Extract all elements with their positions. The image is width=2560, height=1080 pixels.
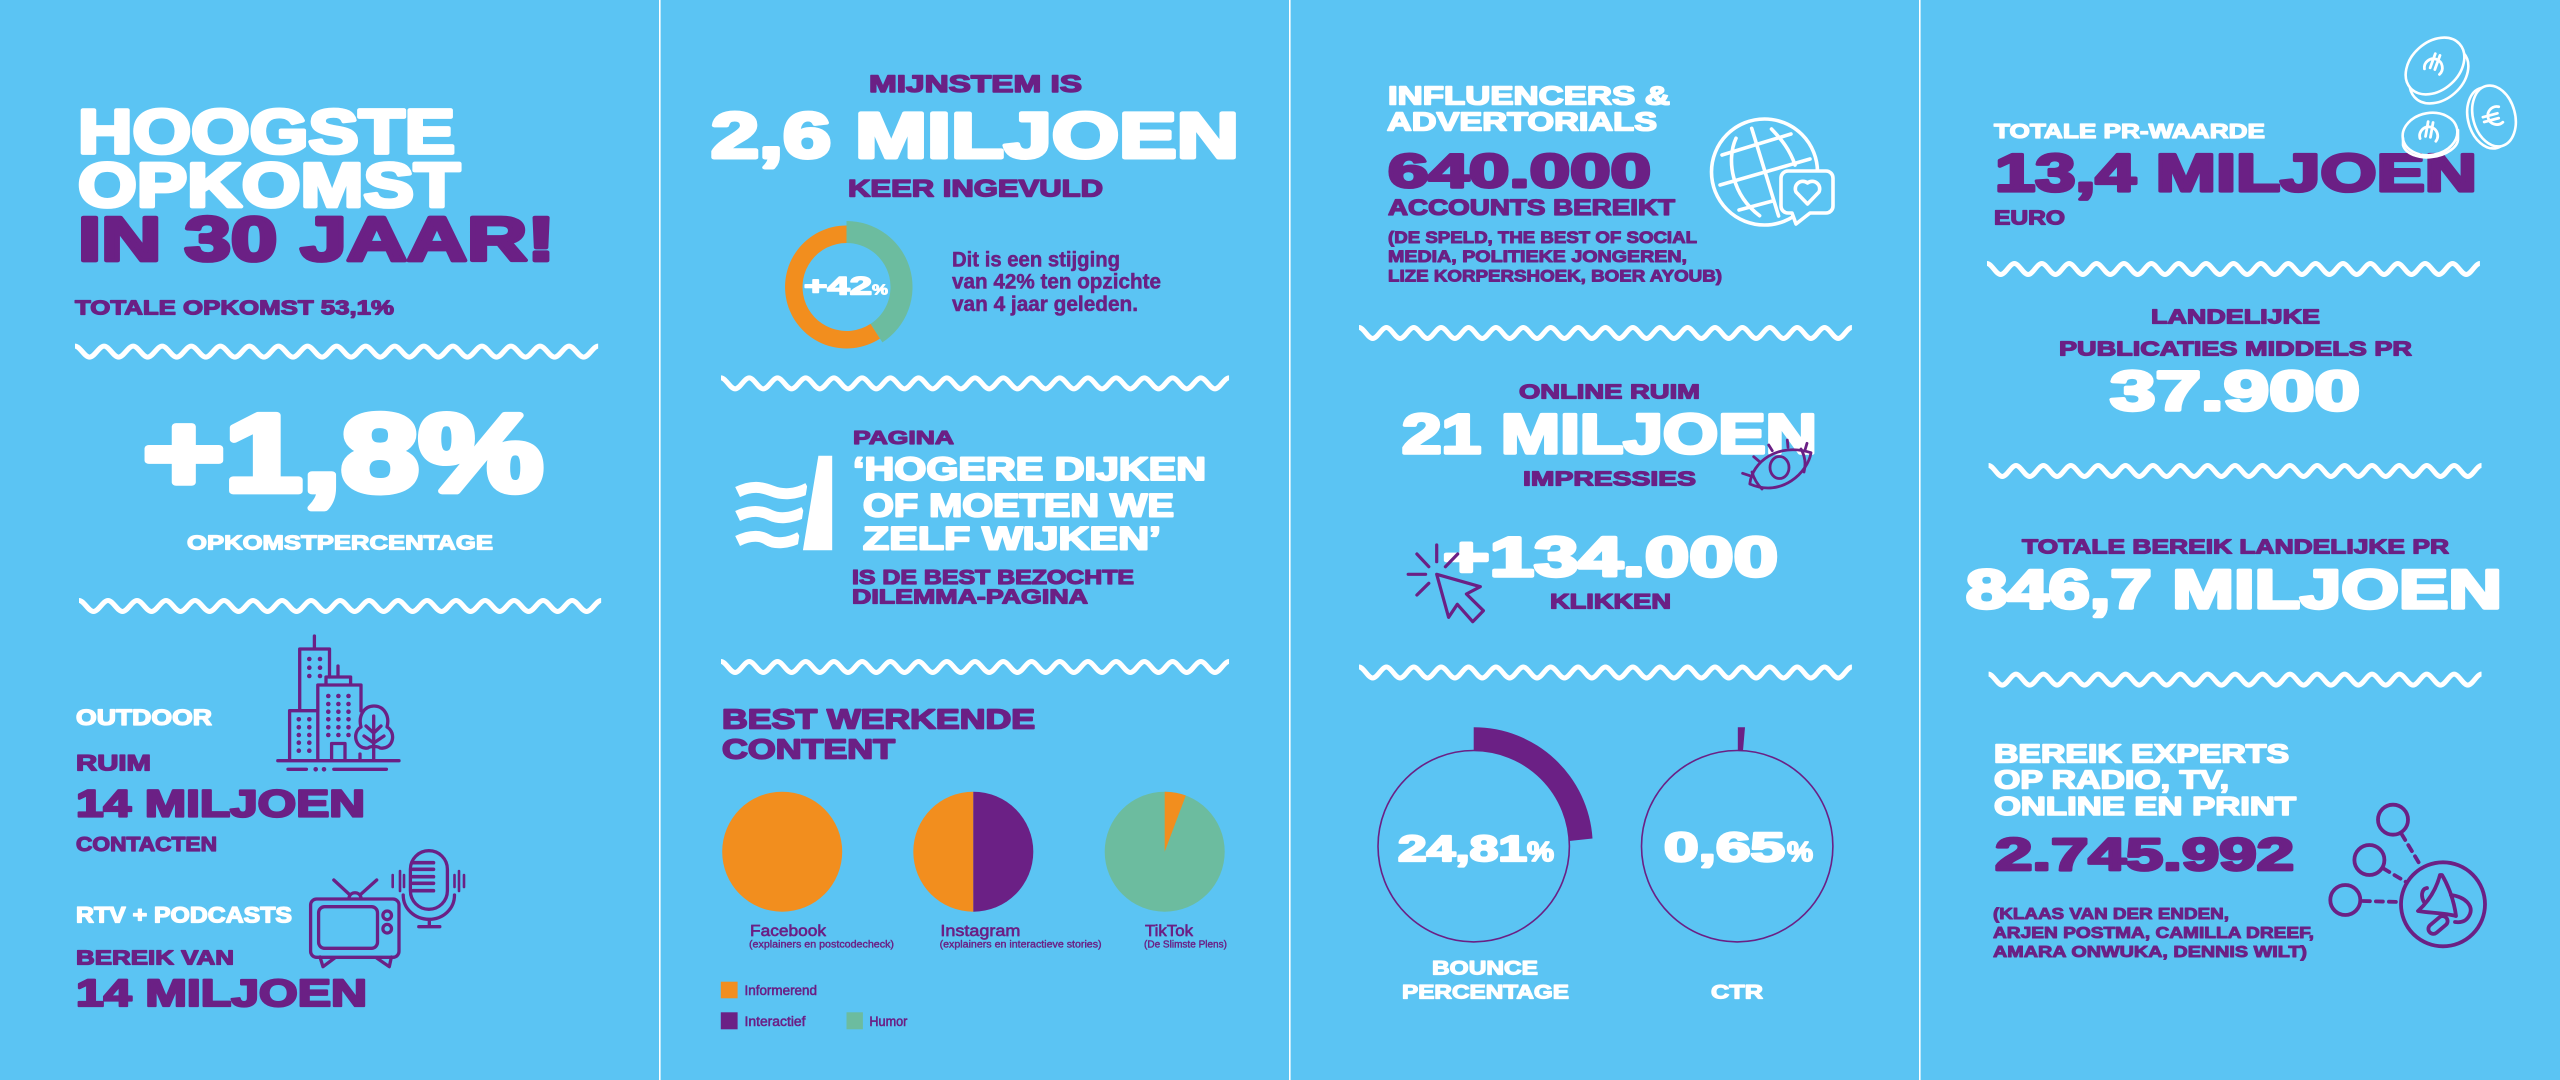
text: landelijke publicaties: PUBLICATIES MIDDELS PR <box>2059 338 2412 360</box>
text: online impressies <box>1402 380 1817 490</box>
text: pr-waarde: EURO <box>1994 206 2065 230</box>
gauge: bounce percentage: % <box>1527 836 1554 867</box>
label: tiktok <box>1144 923 1227 950</box>
outdoor block: CONTACTEN <box>76 834 217 856</box>
pie chart: instagram <box>913 792 1033 912</box>
text: klikken: KLIKKEN <box>1550 590 1671 614</box>
heading: best werkende content: CONTENT <box>722 734 895 764</box>
gauge: ctr: 0,65 <box>1664 824 1785 870</box>
icon: dike and water <box>738 456 832 550</box>
heading: best werkende content <box>722 703 1035 764</box>
label: instagram: Instagram <box>940 923 1020 940</box>
outdoor block: 14 MILJOEN <box>76 783 365 825</box>
label: tiktok: TikTok <box>1145 923 1194 940</box>
text: bereik experts: ONLINE EN PRINT <box>1994 793 2297 821</box>
title: IN 30 JAAR! <box>78 206 555 274</box>
panel: mijnstem <box>711 71 1239 1029</box>
label: instagram: (explainers en interactieve stories) <box>940 939 1102 950</box>
rtv and podcasts block <box>76 902 367 1015</box>
label: facebook: (explainers en postcodecheck) <box>749 939 894 950</box>
legend: Humor <box>869 1014 908 1029</box>
text: stijging: Dit is een stijging <box>952 248 1120 272</box>
text: best bezochte pagina: ‘HOGERE DIJKEN <box>853 451 1206 487</box>
text: online impressies: 21 MILJOEN <box>1402 403 1817 465</box>
text: stijging: van 4 jaar geleden. <box>952 293 1138 316</box>
label: facebook <box>749 923 894 950</box>
total turnout: TOTALE OPKOMST 53,1% <box>75 296 394 320</box>
label: tiktok: (De Slimste Plens) <box>1144 939 1227 950</box>
heading: best werkende content: BEST WERKENDE <box>722 703 1035 734</box>
text: bereik experts: BEREIK EXPERTS <box>1994 740 2289 768</box>
outdoor block: OUTDOOR <box>76 705 212 730</box>
text: online impressies: IMPRESSIES <box>1523 468 1696 490</box>
text: influencers: LIZE KORPERSHOEK, BOER AYOUB) <box>1388 267 1722 285</box>
text: influencers: INFLUENCERS & <box>1388 82 1670 110</box>
text: bereik experts: (KLAAS VAN DER ENDEN, <box>1993 906 2229 923</box>
text: totale bereik: 846,7 MILJOEN <box>1966 558 2502 620</box>
text: best bezochte pagina: IS DE BEST BEZOCHTE <box>852 567 1134 589</box>
icon: city buildings <box>278 636 399 772</box>
gauge: bounce percentage: 24,81 <box>1398 828 1527 869</box>
icon: megaphone network <box>2330 805 2485 946</box>
text: best bezochte pagina: ZELF WIJKEN’ <box>863 520 1161 556</box>
text: influencers: (DE SPELD, THE BEST OF SOCIAL <box>1388 229 1697 247</box>
text: best bezochte pagina <box>852 427 1206 608</box>
text: pr-waarde: 13,4 MILJOEN <box>1995 144 2477 203</box>
text: klikken: +134.000 <box>1443 526 1778 588</box>
icon: eye <box>1743 440 1811 489</box>
text: klikken <box>1443 526 1778 614</box>
text: best bezochte pagina: PAGINA <box>853 427 954 448</box>
icon: euro coins <box>2394 26 2522 159</box>
icon: microphone <box>393 851 464 927</box>
outdoor block: RUIM <box>76 750 151 776</box>
donut chart: +42%: % <box>872 282 888 298</box>
text: landelijke publicaties: LANDELIJKE <box>2151 306 2320 328</box>
gauge: bounce percentage: BOUNCE <box>1432 958 1538 980</box>
text: influencers: MEDIA, POLITIEKE JONGEREN, <box>1388 248 1687 266</box>
outdoor block <box>76 705 365 856</box>
pie chart: facebook <box>722 792 842 912</box>
text: landelijke publicaties: 37.900 <box>2110 360 2360 422</box>
big number: turnout gain: +1,8% <box>143 392 543 515</box>
text: pr-waarde <box>1994 120 2477 230</box>
text: totale bereik: TOTALE BEREIK LANDELIJKE PR <box>2022 536 2449 558</box>
gauge: ctr <box>1642 727 1833 1004</box>
gauge: bounce percentage: PERCENTAGE <box>1402 982 1569 1004</box>
gauge: ctr: % <box>1787 836 1813 867</box>
heading: mijnstem: MIJNSTEM IS <box>869 71 1082 98</box>
text: pr-waarde: TOTALE PR-WAARDE <box>1994 120 2265 143</box>
text: bereik experts <box>1993 740 2314 961</box>
text: influencers: 640.000 <box>1388 145 1651 198</box>
icon: cursor click <box>1408 545 1483 622</box>
panel: opkomst <box>75 98 601 1015</box>
text: bereik experts: OP RADIO, TV, <box>1994 766 2229 794</box>
label: opkomstpercentage: OPKOMSTPERCENTAGE <box>187 532 493 554</box>
legend: Informerend <box>744 983 817 998</box>
text: stijging <box>952 248 1161 316</box>
text: influencers: ADVERTORIALS <box>1387 108 1657 136</box>
text: influencers <box>1387 82 1722 285</box>
icon: television <box>311 880 399 967</box>
rtv and podcasts block: 14 MILJOEN <box>76 973 367 1015</box>
text: landelijke publicaties <box>2059 306 2412 422</box>
donut chart: +42% <box>785 221 913 348</box>
text: best bezochte pagina: OF MOETEN WE <box>863 488 1174 524</box>
heading: mijnstem: KEER INGEVULD <box>848 176 1103 202</box>
gauge: ctr: CTR <box>1711 982 1763 1004</box>
text: totale bereik <box>1966 536 2502 620</box>
donut chart: +42%: +42 <box>804 272 872 300</box>
panel: pr <box>1966 26 2522 961</box>
legend <box>721 982 908 1029</box>
text: bereik experts: AMARA ONWUKA, DENNIS WILT) <box>1993 944 2307 961</box>
legend: Interactief <box>744 1014 806 1029</box>
title: HOOGSTE <box>78 98 455 167</box>
text: best bezochte pagina: DILEMMA-PAGINA <box>852 586 1088 608</box>
text: bereik experts: ARJEN POSTMA, CAMILLA DREEF, <box>1993 925 2314 942</box>
rtv and podcasts block: BEREIK VAN <box>76 946 234 970</box>
label: instagram <box>940 923 1102 950</box>
text: influencers: ACCOUNTS BEREIKT <box>1388 195 1676 220</box>
text: stijging: van 42% ten opzichte <box>952 271 1161 294</box>
heading: mijnstem: 2,6 MILJOEN <box>711 99 1239 171</box>
title: OPKOMST <box>78 152 460 220</box>
pie chart: tiktok <box>1105 792 1225 912</box>
panel: online <box>1359 82 1852 1003</box>
rtv and podcasts block: RTV + PODCASTS <box>76 902 292 928</box>
text: online impressies: ONLINE RUIM <box>1519 380 1700 404</box>
text: bereik experts: 2.745.992 <box>1995 829 2294 880</box>
label: facebook: Facebook <box>750 923 827 940</box>
gauge: bounce percentage <box>1378 727 1592 1004</box>
icon: globe with heart bubble <box>1712 119 1833 225</box>
title <box>78 98 555 274</box>
heading: mijnstem <box>711 71 1239 202</box>
